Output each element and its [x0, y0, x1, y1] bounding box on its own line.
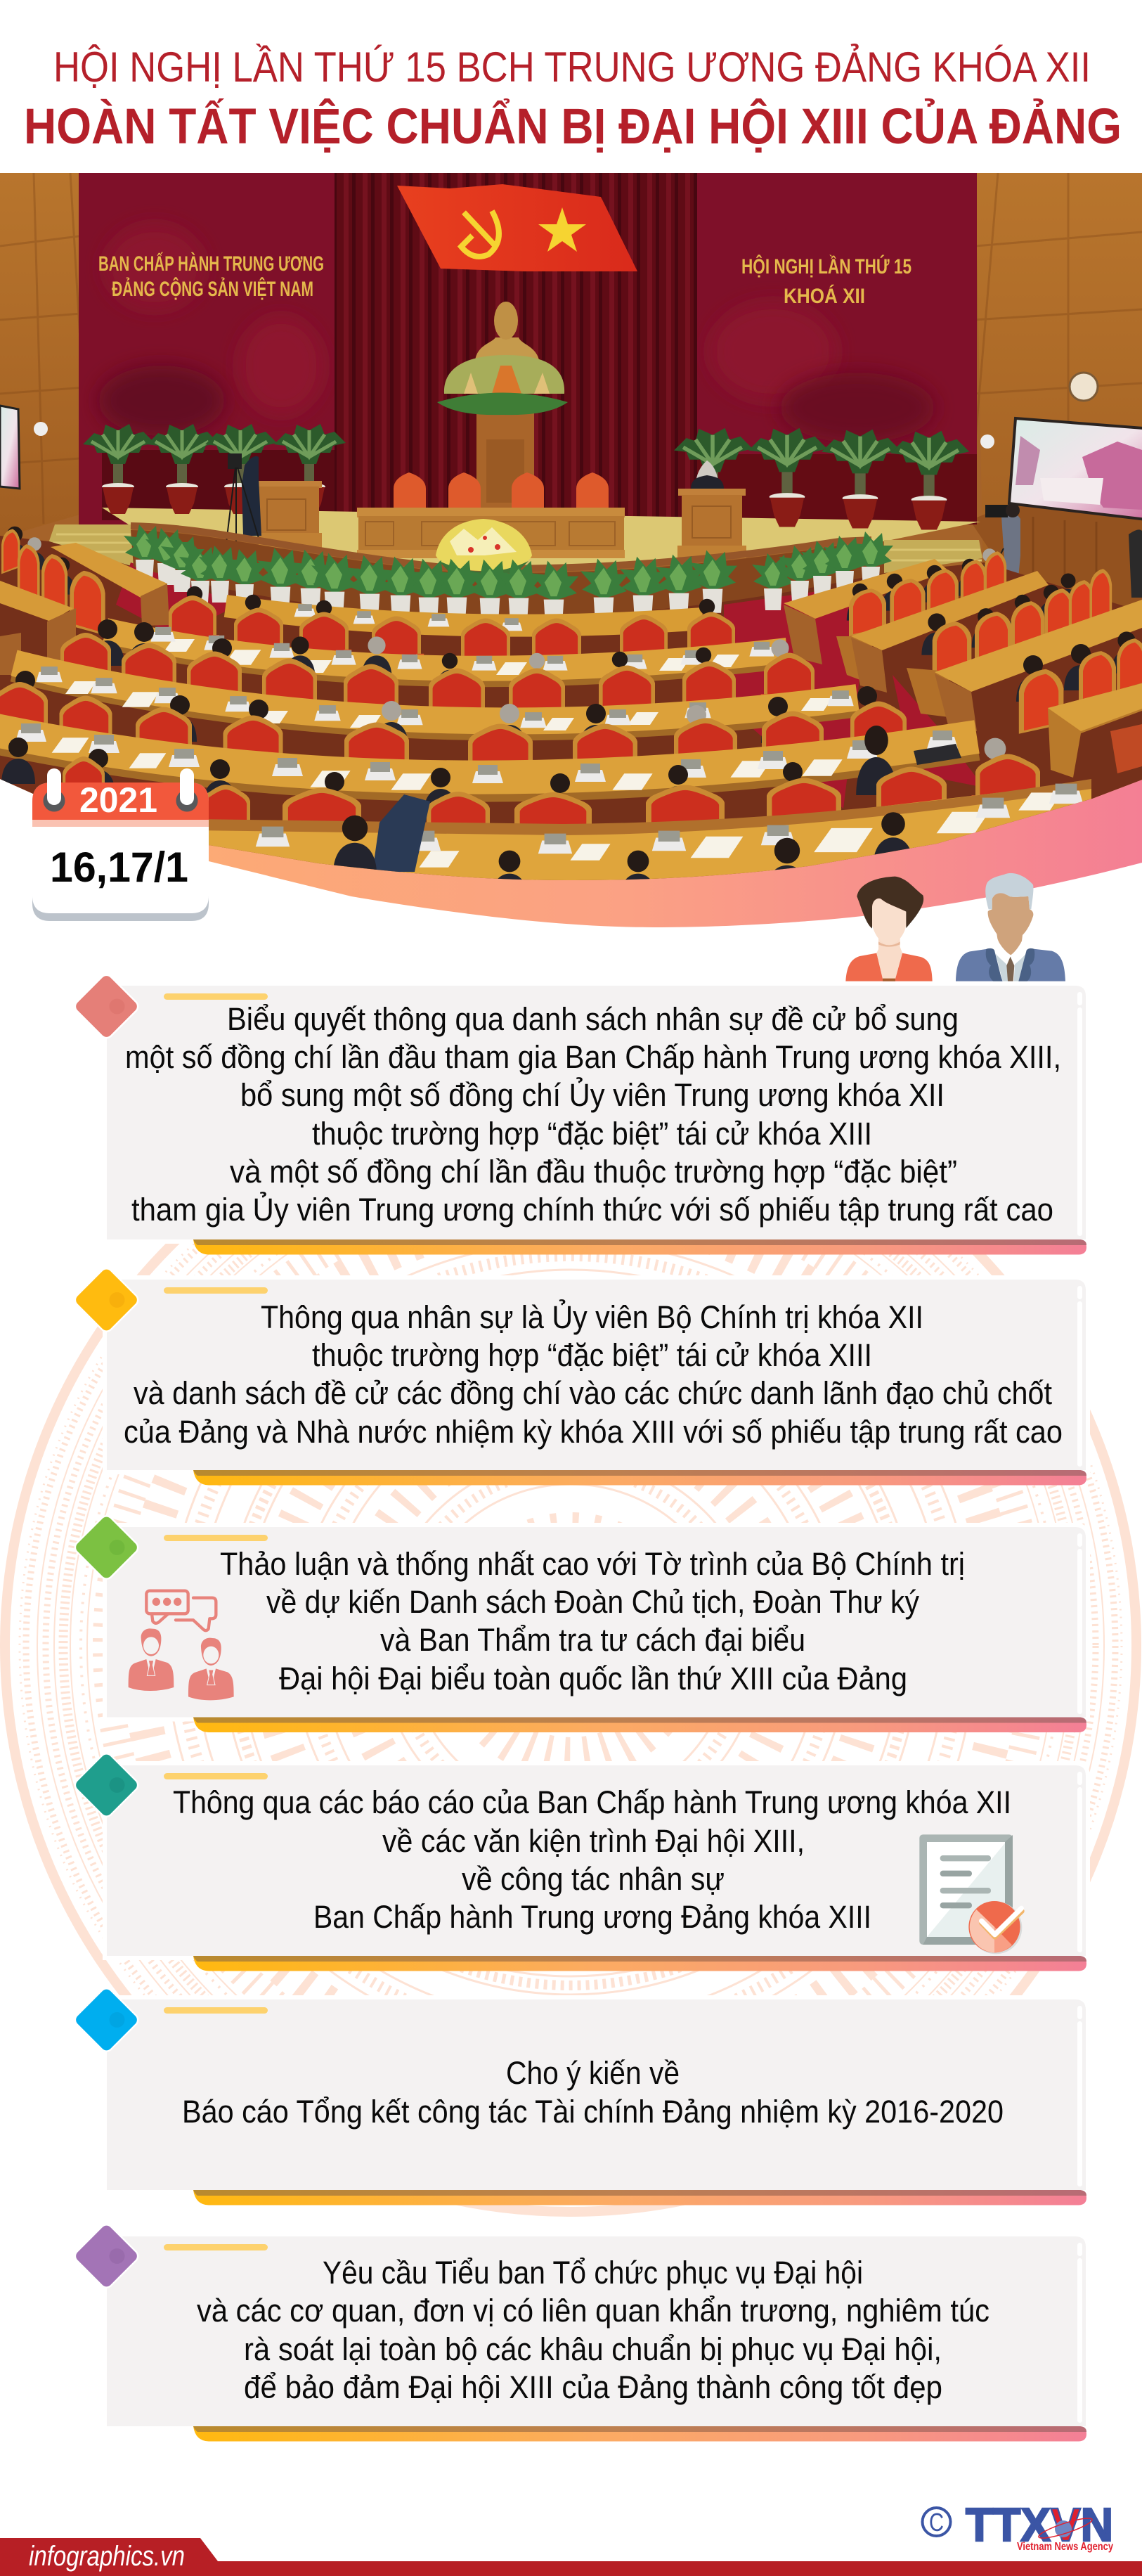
logo: TTXVN: TTXVN — [966, 2499, 1113, 2551]
panel text: Đại hội Đại biểu toàn quốc lần thứ XIII của Đảng — [279, 1661, 907, 1696]
panel text — [182, 2055, 1004, 2130]
panel text: Yêu cầu Tiểu ban Tổ chức phục vụ Đại hội — [323, 2255, 863, 2291]
curved colour band under photo — [0, 773, 1142, 927]
row 2: desk, delegates, chairs — [58, 619, 817, 716]
stage floor — [47, 508, 982, 574]
icon: two people talking — [129, 1591, 234, 1700]
panel text: và Ban Thẩm tra tư cách đại biểu — [380, 1622, 805, 1658]
panel text: và danh sách đề cử các đồng chí vào các chức danh lãnh đạo chủ chốt — [134, 1375, 1052, 1411]
panel text: về công tác nhân sự — [462, 1861, 725, 1897]
panel text: Thảo luận và thống nhất cao với Tờ trình của Bộ Chính trị — [220, 1546, 965, 1582]
diamond marker — [74, 2223, 139, 2289]
panel 2: Politburo personnel — [74, 1267, 1086, 1485]
panel text — [173, 1784, 1011, 1935]
lecterns and speaker — [254, 461, 746, 558]
diamond marker — [74, 1752, 139, 1818]
row 1: desk, delegates, chairs — [166, 586, 738, 661]
camera operators on stage — [226, 453, 1142, 598]
panel text: Ban Chấp hành Trung ương Đảng khóa XIII — [313, 1899, 871, 1935]
panel text: bổ sung một số đồng chí Ủy viên Trung ương khóa XII — [240, 1077, 945, 1113]
background seal: bronze drum pattern — [5, 1080, 1136, 2212]
panel text: của Đảng và Nhà nước nhiệm kỳ khóa XIII với số phiếu tập trung rất cao — [124, 1414, 1063, 1450]
row 4: desk, delegates, chairs — [0, 723, 1044, 837]
right wing desks and chairs — [784, 548, 1142, 778]
banner text: ĐẢNG CỘNG SẢN VIỆT NAM — [112, 277, 313, 301]
wood side walls — [0, 173, 1142, 619]
bust, flowers and pedestal — [437, 302, 568, 508]
panel text: và các cơ quan, đơn vị có liên quan khẩn trương, nghiêm túc — [197, 2293, 989, 2329]
party flag — [397, 184, 637, 271]
panel text: về các văn kiện trình Đại hội XIII, — [382, 1823, 805, 1859]
diamond marker — [74, 974, 139, 1039]
left wing desks and chairs — [0, 527, 169, 675]
panel text: rà soát lại toàn bộ các khâu chuẩn bị phục vụ Đại hội, — [244, 2331, 942, 2367]
seating base and carpet — [0, 536, 1142, 914]
panel text: về dự kiến Danh sách Đoàn Chủ tịch, Đoàn Thư ký — [266, 1584, 919, 1620]
panel text — [220, 1546, 965, 1696]
calendar: date badge: 16,17/1 — [50, 844, 188, 891]
diamond marker — [74, 1987, 139, 2053]
panel text: để bảo đảm Đại hội XIII của Đảng thành công tốt đẹp — [244, 2369, 942, 2405]
footer band with site name: infographics.vn — [29, 2541, 185, 2572]
panel 3: presidium list — [74, 1514, 1086, 1732]
banner text — [98, 252, 911, 308]
flower basket — [436, 519, 532, 573]
diamond marker — [74, 1514, 139, 1580]
presidium chairs and table — [357, 472, 625, 558]
panel text: Thông qua nhân sự là Ủy viên Bộ Chính trị khóa XII — [261, 1299, 923, 1335]
stage palms — [83, 424, 969, 530]
logo: TTXVN: Vietnam News Agency — [1017, 2541, 1113, 2553]
banner text: BAN CHẤP HÀNH TRUNG ƯƠNG — [98, 252, 324, 276]
icon: woman delegate — [845, 877, 933, 981]
panel 6: congress preparation — [74, 2223, 1086, 2441]
panel text: Biểu quyết thông qua danh sách nhân sự đề cử bổ sung — [227, 1001, 959, 1037]
calendar: date badge — [32, 768, 209, 921]
title — [24, 44, 1122, 155]
photo: conference hall — [0, 173, 1142, 914]
panel text: một số đồng chí lần đầu tham gia Ban Chấp hành Trung ương khóa XIII, — [125, 1039, 1061, 1075]
potted plants row — [124, 524, 893, 624]
stage rail and front wall — [131, 526, 884, 617]
banner text: HỘI NGHỊ LẦN THỨ 15 — [741, 255, 911, 278]
panel 5: finance report — [74, 1987, 1086, 2205]
icon: approved document — [919, 1834, 1022, 1954]
panel text: và một số đồng chí lần đầu thuộc trường hợp “đặc biệt” — [230, 1154, 957, 1190]
banner text: KHOÁ XII — [784, 284, 865, 308]
footer band with site name — [0, 2538, 1142, 2576]
icon: male delegate — [956, 873, 1065, 981]
diamond marker — [74, 1267, 139, 1333]
panel text — [197, 2255, 989, 2405]
panel text: Cho ý kiến về — [506, 2055, 680, 2091]
panel 4: reports — [74, 1752, 1086, 1971]
panel text: thuộc trường hợp “đặc biệt” tái cử khóa XIII — [312, 1337, 872, 1373]
screens, clock and cameras on walls — [0, 373, 1142, 520]
panel 1: personnel vote — [74, 974, 1086, 1254]
logo: TTXVN: C — [929, 2508, 944, 2537]
front row desk with papers and delegates — [141, 779, 1091, 914]
panel text: Thông qua các báo cáo của Ban Chấp hành Trung ương khóa XII — [173, 1784, 1011, 1820]
panel text: thuộc trường hợp “đặc biệt” tái cử khóa XIII — [312, 1116, 872, 1152]
panel text: Báo cáo Tổng kết công tác Tài chính Đảng nhiệm kỳ 2016-2020 — [182, 2094, 1004, 2130]
row 3: desk, delegates, chairs — [0, 663, 910, 771]
panel text — [124, 1299, 1063, 1450]
panel text — [125, 1001, 1061, 1228]
red velvet banners and curtain — [79, 173, 977, 524]
calendar: date badge: 2021 — [79, 780, 157, 820]
panel text: tham gia Ủy viên Trung ương chính thức với số phiếu tập trung rất cao — [131, 1192, 1053, 1228]
